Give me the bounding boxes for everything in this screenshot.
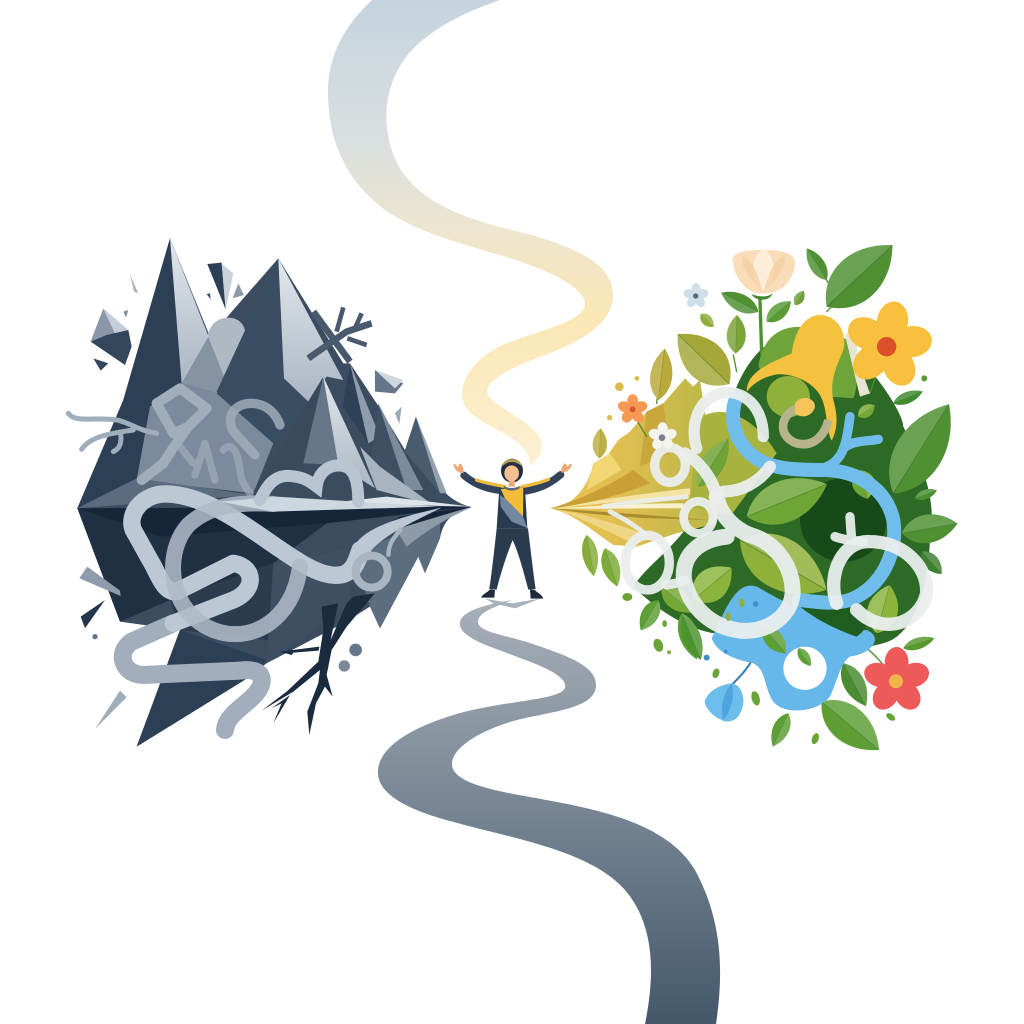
mountain base silhouette: [77, 238, 472, 747]
small right peaks: [343, 363, 447, 505]
tangled pale ribbon, main loop: [132, 494, 360, 623]
dark green pocket above the pool: [800, 604, 867, 637]
small yellow curl over ring: [783, 398, 828, 444]
tangled pale ribbon, lower S: [123, 623, 262, 730]
broken dead branch: [308, 307, 372, 362]
head and hair: [501, 459, 523, 490]
deep shadow core: [800, 478, 887, 562]
lime patch inside yellow arch: [767, 376, 810, 417]
orange small flower: [617, 394, 649, 425]
floating rock shards: [79, 263, 403, 729]
green dome behind the yellow form: [758, 327, 857, 398]
tangled pale ribbon, ring: [173, 503, 300, 634]
white flowing ribbons: [603, 392, 927, 631]
fan streaks: [550, 403, 710, 542]
upper ribbon knots: [68, 388, 280, 493]
fractured underside: [77, 507, 472, 747]
peach tulip flower: [733, 248, 795, 300]
leaf in white ring: [794, 645, 815, 669]
foliage leaves: [579, 229, 969, 764]
hands: [453, 463, 572, 473]
figure shadow: [485, 599, 540, 608]
blue river stroke: [733, 397, 894, 603]
torso: [497, 488, 527, 528]
tall left peak: [77, 238, 224, 508]
front peak: [253, 377, 375, 492]
legs: [489, 528, 536, 590]
yellow flower with red centre: [835, 294, 942, 397]
dark cracked roots: [262, 593, 375, 735]
ribbon bright tip: [220, 497, 437, 512]
ribbon tapered tail to the tip: [352, 508, 442, 578]
rounded hump behind peaks: [207, 318, 245, 383]
grey shirt band: [500, 495, 527, 528]
leaves on the pool: [675, 613, 793, 663]
mid slope shading: [137, 383, 273, 493]
pale blue small flower: [682, 283, 710, 309]
shoes: [481, 589, 543, 599]
blue bell flower: [705, 683, 743, 722]
central figure with arms raised: [453, 459, 572, 608]
cloud-shaped ribbon loop: [260, 465, 358, 502]
small ring on ribbon: [356, 528, 402, 588]
red flower with yellow centre: [861, 647, 932, 715]
blue pool at the bottom: [712, 586, 875, 711]
sky ribbon flowing down to the figure: [328, 0, 613, 466]
olive patch behind ribbons: [690, 412, 777, 517]
right panel: flourishing green island: [550, 229, 969, 764]
second peak: [217, 258, 343, 443]
tip fan streaks: [327, 497, 472, 547]
golden fan towards figure: [550, 378, 717, 547]
white ring opening in pool: [783, 647, 827, 690]
white small flower: [647, 422, 678, 451]
pale petal behind yellow form: [845, 332, 870, 397]
stems: [637, 280, 887, 685]
green core mass: [633, 332, 932, 650]
winding road to the bottom: [378, 600, 720, 1024]
left panel: fractured grey mountain island: [68, 238, 472, 747]
yellow shirt panel: [501, 488, 523, 517]
yellow blob form: [747, 315, 844, 441]
scattered seeds and dots: [607, 375, 927, 745]
arms: [464, 475, 561, 491]
